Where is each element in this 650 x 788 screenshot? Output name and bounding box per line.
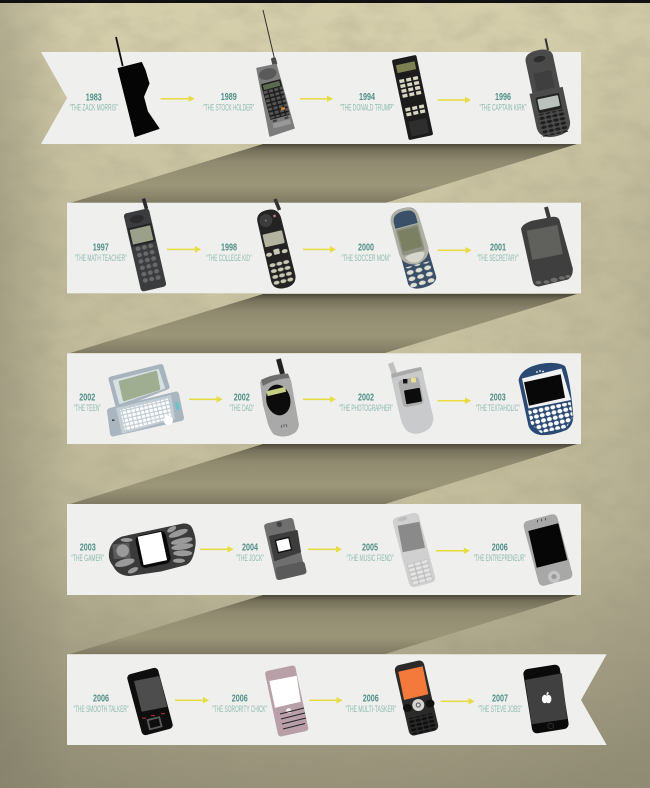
caption: 1994: 1994: [359, 92, 375, 103]
caption: 2006 smooth talker: [74, 694, 128, 714]
arrow: [175, 697, 209, 704]
phone 1998: [255, 199, 298, 291]
ribbon banner 5: [67, 654, 607, 745]
caption: 2002 photographer: “THE PHOTOGRAPHER”: [339, 403, 393, 413]
fold: ribbon 3 to 4: [70, 444, 577, 504]
panel: ribbon row 4: [67, 504, 581, 595]
arrow: [438, 397, 471, 404]
caption: 2000: [342, 243, 390, 263]
ribbon banner 3: [67, 353, 581, 444]
caption: 2005: [346, 543, 394, 563]
phone 1983: [116, 37, 159, 136]
arrow: [438, 247, 472, 254]
phone 2000: [388, 205, 438, 291]
arrow: [303, 396, 336, 403]
arrow: [441, 698, 475, 705]
caption: 1998: “THE COLLEGE KID”: [206, 253, 252, 263]
phone 2005: [392, 512, 436, 588]
panel: ribbon row 5: [67, 654, 607, 745]
caption: 2000: “THE SOCCER MOM”: [342, 253, 390, 263]
arrow: [436, 547, 470, 554]
caption: 1996: “THE CAPTAIN KIRK”: [480, 102, 526, 112]
caption: 2007: 2007: [492, 694, 508, 705]
phone 2002 camera flip: [390, 363, 434, 434]
caption: 1983: “THE ZACK MORRIS”: [70, 102, 118, 112]
arrow: [308, 546, 342, 553]
caption: 2007: [478, 694, 522, 714]
caption: 2001: 2001: [490, 243, 506, 254]
caption: 1998: [206, 243, 252, 263]
caption: 2007: “THE STEVE JOBS”: [478, 704, 522, 714]
caption: 2000: 2000: [358, 243, 374, 254]
caption: 1989: “THE STOCK HOLDER”: [203, 102, 254, 112]
caption: 2006 smooth talker: 2006: [93, 694, 109, 705]
caption: 1996: [480, 92, 526, 112]
ribbon banner 4: [67, 504, 581, 595]
caption: 1989: 1989: [221, 92, 237, 103]
caption: 2002 teen: [74, 393, 101, 413]
phone 1989: [257, 10, 294, 136]
caption: 2002 dad: “THE DAD”: [229, 403, 254, 413]
phone 2006 slider: [126, 667, 174, 736]
caption: 2003 textaholic: “THE TEXTAHOLIC”: [476, 403, 520, 413]
phone 2003 blackberry: [518, 363, 573, 435]
caption: 2006 sorority chick: 2006: [232, 694, 248, 705]
caption: 2004 jock: 2004: [242, 543, 258, 554]
phone 2006 entrepreneur: [522, 513, 574, 587]
caption: 2001: “THE SECRETARY”: [477, 253, 519, 263]
phone 2002 flip: [260, 359, 299, 436]
panel: ribbon row 2: [67, 198, 581, 293]
caption: 2003 textaholic: [476, 393, 520, 413]
arrow: [200, 546, 234, 553]
caption: 1994: “THE DONALD TRUMP”: [340, 102, 394, 112]
phone 2007 iphone: [523, 664, 569, 734]
icon: apple logo: [542, 692, 551, 703]
caption: 2006 multi-tasker: [345, 694, 396, 714]
caption: 2006 sorority chick: “THE SORORITY CHICK”: [212, 704, 267, 714]
caption: 1996: 1996: [495, 92, 511, 103]
phone 2004 razr: [264, 517, 307, 581]
caption: 2001: [477, 243, 519, 263]
caption: 2003 gamer: [71, 543, 104, 563]
caption: 2002 dad: 2002: [234, 393, 250, 404]
caption: 1983: 1983: [86, 93, 102, 104]
fold: ribbon 2 to 3: [70, 294, 577, 353]
ribbon banner 2: [67, 203, 581, 293]
ribbon banner 1: [41, 52, 581, 144]
fold: ribbon 1 to 2: [70, 144, 577, 203]
arrow: [167, 246, 201, 253]
phone 2006 walkman: [394, 660, 439, 736]
caption: 2006 multi-tasker: “THE MULTI-TASKER”: [345, 704, 396, 714]
panel: ribbon row 3: [67, 353, 581, 444]
caption: 2003 gamer: “THE GAMER”: [71, 553, 104, 563]
caption: 2002 photographer: 2002: [358, 393, 374, 404]
phone 2001: [521, 207, 573, 287]
caption: 2002 teen: 2002: [79, 393, 96, 404]
phone 2006 pearl: [265, 665, 309, 737]
caption: 2003 gamer: 2003: [80, 543, 96, 554]
caption: 1997: 1997: [93, 243, 109, 254]
arrow: [309, 697, 343, 704]
caption: 2006 multi-tasker: 2006: [363, 694, 379, 705]
caption: 2006 smooth talker: “THE SMOOTH TALKER”: [74, 704, 128, 714]
caption: 2005: 2005: [362, 543, 378, 554]
phone 1994: [392, 55, 433, 140]
caption: 2006 entrepreneur: “THE ENTREPRENEUR”: [474, 553, 526, 563]
fold: ribbon 4 to 5: [70, 595, 577, 654]
caption: 2004 jock: [236, 543, 264, 563]
arrow: [303, 246, 336, 253]
caption: 1983: [70, 93, 118, 112]
phone 1997: [123, 198, 167, 292]
caption: 1994: [340, 92, 394, 112]
caption: 1998: 1998: [221, 243, 237, 254]
panel: ribbon row 1: [41, 10, 581, 144]
phone 2003 n-gage: [109, 523, 196, 576]
caption: 2005: “THE MUSIC FIEND”: [346, 553, 394, 563]
caption: 1989: [203, 92, 254, 112]
caption: 2006 entrepreneur: [474, 543, 526, 563]
caption: 2003 textaholic: 2003: [490, 393, 506, 404]
top black bar: [0, 0, 650, 3]
caption: 2006 entrepreneur: 2006: [492, 543, 508, 554]
arrow: [189, 396, 223, 403]
phone 1996: [521, 38, 572, 140]
arrow: [300, 96, 333, 102]
caption: 2002 teen: “THE TEEN”: [74, 403, 101, 413]
arrow: [161, 96, 195, 102]
arrow: [438, 97, 471, 103]
phone 2002 sidekick: [110, 366, 181, 434]
caption: 1997: [75, 243, 127, 263]
caption: 1997: “THE MATH TEACHER”: [75, 253, 127, 263]
caption: 2006 sorority chick: [212, 694, 267, 714]
caption: 2002 dad: [229, 393, 254, 413]
caption: 2002 photographer: [339, 393, 393, 413]
caption: 2004 jock: “THE JOCK”: [236, 553, 264, 563]
